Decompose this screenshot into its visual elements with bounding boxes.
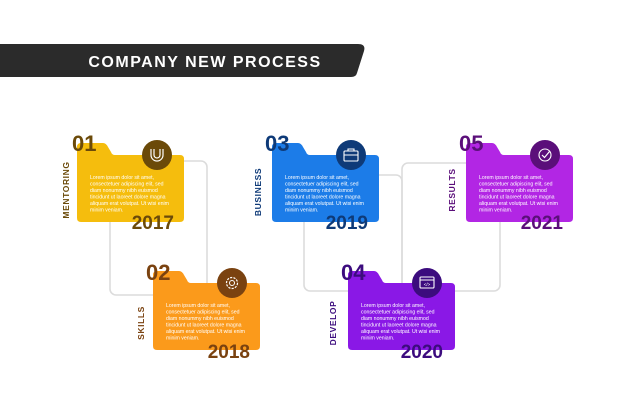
step 04: develop: DEVELOP: [328, 301, 338, 345]
step 02: skills: tincidunt ut laoreet dolore magna: [166, 322, 242, 328]
icon: gear: [217, 268, 247, 298]
text: minim veniam.: [90, 208, 123, 214]
step 03: business: consectetuer adipiscing elit, sed: [285, 182, 359, 188]
step 02: skills: [136, 260, 260, 363]
step 04: develop: aliquam erat volutpat. Ut wisi enim: [361, 329, 440, 335]
step 05: results: Lorem ipsum dolor sit amet,: [479, 175, 543, 181]
step 05: results: minim veniam.: [479, 208, 512, 214]
title bar: [0, 44, 364, 77]
step 05: results: [447, 131, 573, 234]
step 04: develop: consectetuer adipiscing elit, sed: [361, 310, 435, 316]
step 03: business: minim veniam.: [285, 208, 318, 214]
step 03: business: tincidunt ut laoreet dolore magna: [285, 194, 361, 200]
step 02: skills: 2018: [208, 342, 250, 363]
text: Lorem ipsum dolor sit amet,: [90, 175, 154, 181]
step 02: skills: aliquam erat volutpat. Ut wisi enim: [166, 329, 245, 335]
step 05: results: 2021: [521, 213, 563, 234]
step 02: skills: consectetuer adipiscing elit, sed: [166, 310, 240, 316]
icon: code window: </>: [424, 282, 431, 287]
step 04: develop: 2020: [401, 342, 443, 363]
step 03: business: [253, 131, 379, 234]
step 02: skills: diam nonummy nibh euismod: [166, 316, 234, 322]
step 02: skills: SKILLS: [136, 306, 146, 340]
step 05: results: consectetuer adipiscing elit, sed: [479, 182, 553, 188]
step 01: mentoring: 2017: [132, 213, 174, 234]
step 03: business: Lorem ipsum dolor sit amet,: [285, 175, 349, 181]
step 01: mentoring: [61, 131, 184, 234]
step 03: business: 2019: [326, 213, 368, 234]
text: tincidunt ut laoreet dolore magna: [90, 194, 166, 200]
connector lines: [110, 161, 500, 295]
step 03: business: BUSINESS: [253, 168, 263, 216]
icon: magnet: [142, 140, 172, 170]
step 01: mentoring: 01: [72, 131, 96, 156]
icon: briefcase: [336, 140, 366, 170]
step 03: business: diam nonummy nibh euismod: [285, 188, 353, 194]
text: aliquam erat volutpat. Ut wisi enim: [90, 201, 169, 207]
step 05: results: 05: [459, 131, 483, 156]
title bar: COMPANY NEW PROCESS: [88, 54, 322, 71]
step 04: develop: Lorem ipsum dolor sit amet,: [361, 303, 425, 309]
step 05: results: tincidunt ut laoreet dolore magna: [479, 194, 555, 200]
step 04: develop: diam nonummy nibh euismod: [361, 316, 429, 322]
step 02: skills: minim veniam.: [166, 336, 199, 342]
step 02: skills: 02: [146, 260, 170, 285]
step 05: results: RESULTS: [447, 168, 457, 212]
step 03: business: aliquam erat volutpat. Ut wisi enim: [285, 201, 364, 207]
step 05: results: diam nonummy nibh euismod: [479, 188, 547, 194]
text: diam nonummy nibh euismod: [90, 188, 158, 194]
step 02: skills: Lorem ipsum dolor sit amet,: [166, 303, 230, 309]
icon: check: [530, 140, 560, 170]
step 05: results: aliquam erat volutpat. Ut wisi enim: [479, 201, 558, 207]
step 04: develop: [328, 260, 455, 363]
step 04: develop: minim veniam.: [361, 336, 394, 342]
step 04: develop: 04: [341, 260, 366, 285]
text: consectetuer adipiscing elit, sed: [90, 182, 164, 188]
step 01: mentoring: MENTORING: [61, 161, 71, 219]
step 04: develop: tincidunt ut laoreet dolore magna: [361, 322, 437, 328]
step 03: business: 03: [265, 131, 289, 156]
